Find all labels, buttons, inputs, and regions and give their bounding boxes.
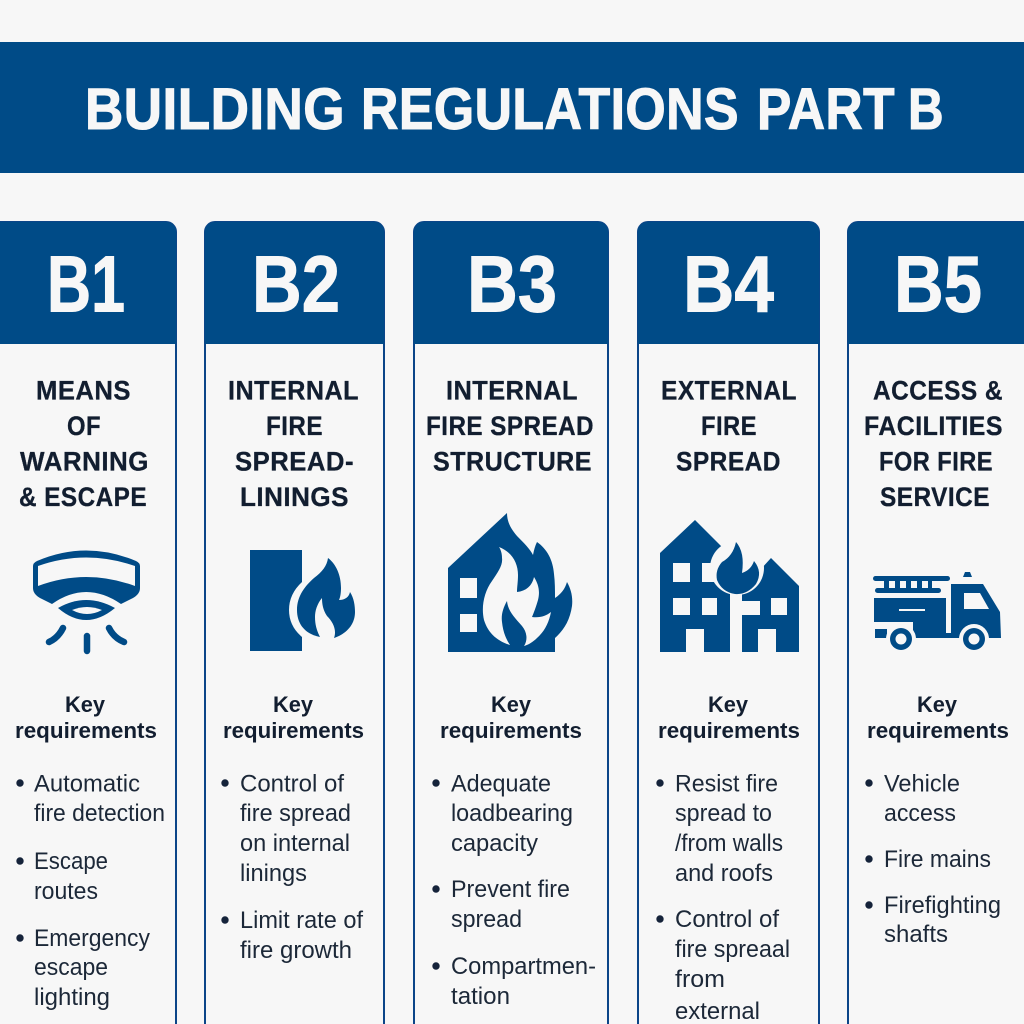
B1 heading: MEANS <box>36 376 131 406</box>
B3 header <box>414 222 608 344</box>
B5 key requirements label: Key <box>917 692 958 717</box>
B4 heading <box>661 376 797 476</box>
B4 header <box>638 222 819 344</box>
B4 heading: EXTERNAL <box>661 376 797 406</box>
B2 requirements list: fire growth <box>240 937 352 964</box>
B3 header: B3 <box>467 240 557 328</box>
B2 requirements list: on internal <box>240 830 350 857</box>
B5 heading: FOR FIRE <box>879 446 993 476</box>
B3 requirements list: Adequate <box>451 770 551 798</box>
B5 key requirements label: requirements <box>867 718 1009 743</box>
title banner: PART <box>757 77 895 142</box>
B4 requirements list: from <box>675 966 725 993</box>
B2 header: B2 <box>252 240 340 328</box>
B2 key requirements label <box>223 692 364 743</box>
B5 requirements list: Vehicle <box>884 770 960 798</box>
B1 header: B1 <box>47 240 125 328</box>
icon: wall lining with flame <box>250 550 355 651</box>
B5 requirements list: Firefighting <box>884 892 1001 919</box>
B1 key requirements label <box>15 692 157 743</box>
B2 requirements list: Limit rate of <box>240 907 363 934</box>
B3 heading <box>426 376 594 476</box>
B3 requirements list: spread <box>451 906 522 933</box>
icon: smoke detector <box>33 550 140 651</box>
B4 requirements list <box>656 770 790 1024</box>
B1 requirements list: lighting <box>34 984 110 1011</box>
B1 requirements list: Emergency <box>34 925 150 952</box>
B4 requirements list: fire spreaal <box>675 936 790 963</box>
B5 heading: ACCESS & <box>873 376 1003 406</box>
B5 requirements list <box>865 770 1001 948</box>
B2 heading <box>228 376 359 512</box>
icon: neighbouring buildings with fire <box>660 520 799 652</box>
B3 key requirements label <box>440 692 582 743</box>
B4 requirements list: and roofs <box>675 860 773 887</box>
B4 key requirements label <box>658 692 800 743</box>
B4 key requirements label: Key <box>708 692 749 717</box>
panel: B4 external fire spread <box>638 222 819 1024</box>
B5 heading <box>864 376 1003 512</box>
panel: B2 internal fire spread linings <box>205 222 384 1024</box>
B5 header: B5 <box>894 240 982 328</box>
B2 heading: LININGS <box>240 482 349 512</box>
B4 key requirements label: requirements <box>658 718 800 743</box>
B5 key requirements label <box>867 692 1009 743</box>
B1 requirements list: escape <box>34 954 108 981</box>
B5 requirements list: Fire mains <box>884 846 991 873</box>
B4 requirements list: Resist fire <box>675 770 778 798</box>
B1 key requirements label: requirements <box>15 718 157 743</box>
B5 requirements list: access <box>884 800 956 827</box>
B5 heading: FACILITIES <box>864 411 1003 441</box>
icon: fire engine <box>873 572 1001 654</box>
B2 requirements list: Control of <box>240 770 344 798</box>
B5 header <box>848 222 1024 344</box>
B1 requirements list <box>16 770 165 1011</box>
B2 key requirements label: Key <box>273 692 314 717</box>
title banner: REGULATIONS <box>361 77 739 142</box>
B2 heading: INTERNAL <box>228 376 359 406</box>
panel: B1 means of warning and escape <box>0 222 176 1024</box>
B3 key requirements label: Key <box>491 692 532 717</box>
B3 requirements list: capacity <box>451 830 538 857</box>
B1 requirements list: Escape <box>34 848 108 875</box>
B4 requirements list: Control of <box>675 906 779 933</box>
B2 requirements list: fire spread <box>240 800 351 827</box>
B4 heading: SPREAD <box>676 446 781 476</box>
panel: B3 internal fire spread structure <box>414 222 608 1024</box>
B1 heading: & ESCAPE <box>19 482 147 512</box>
B4 requirements list: spread to <box>675 800 772 827</box>
B3 heading: INTERNAL <box>446 376 578 406</box>
B5 requirements list: shafts <box>884 921 948 948</box>
B1 requirements list: Automatic <box>34 770 140 798</box>
B2 requirements list <box>221 770 363 964</box>
B1 header <box>0 222 176 344</box>
B2 header <box>205 222 384 344</box>
B3 key requirements label: requirements <box>440 718 582 743</box>
B3 heading: STRUCTURE <box>433 446 592 476</box>
B5 heading: SERVICE <box>880 482 990 512</box>
B2 heading: SPREAD- <box>235 446 354 476</box>
B4 requirements list: /from walls <box>675 830 783 857</box>
B4 heading: FIRE <box>701 411 757 441</box>
B1 heading <box>19 376 149 512</box>
title banner: B <box>908 77 944 142</box>
B1 requirements list: routes <box>34 878 98 905</box>
B2 requirements list: linings <box>240 860 307 887</box>
title banner <box>0 42 1024 173</box>
B2 key requirements label: requirements <box>223 718 364 743</box>
B1 requirements list: fire detection <box>34 800 165 827</box>
B4 header: B4 <box>683 240 774 328</box>
icon: building on fire <box>448 513 572 652</box>
panel: B5 access and facilities for fire service <box>848 222 1024 1024</box>
B3 requirements list: tation <box>451 983 510 1010</box>
B3 requirements list: Compartmen- <box>451 953 596 980</box>
B3 requirements list: Prevent fire <box>451 876 570 903</box>
B1 heading: OF <box>67 411 101 441</box>
B3 heading: FIRE SPREAD <box>426 411 594 441</box>
title banner: BUILDING <box>85 77 345 142</box>
B1 heading: WARNING <box>20 446 149 476</box>
B1 key requirements label: Key <box>65 692 106 717</box>
B2 heading: FIRE <box>266 411 323 441</box>
B3 requirements list <box>432 770 596 1010</box>
B3 requirements list: loadbearing <box>451 800 573 827</box>
